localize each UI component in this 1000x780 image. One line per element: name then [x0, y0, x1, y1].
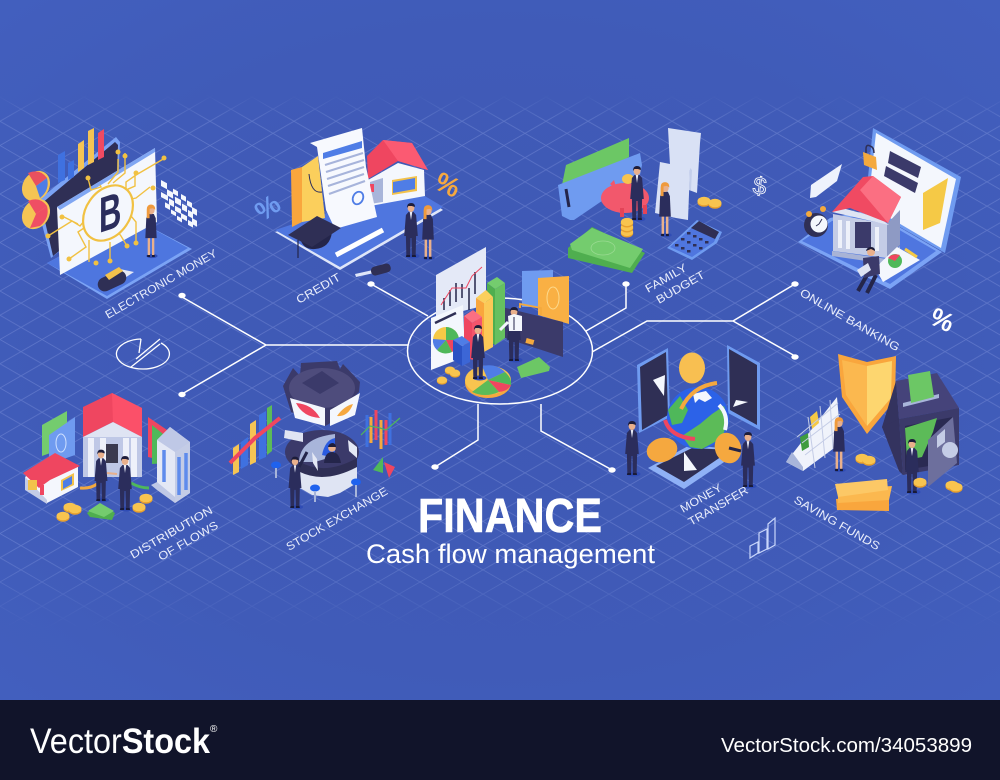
bank building	[83, 393, 142, 477]
man back view	[471, 325, 486, 380]
bar chart on laptop	[58, 128, 104, 183]
handshake men	[95, 450, 134, 512]
qr code	[161, 180, 197, 231]
sitting man with laptop	[857, 247, 880, 293]
shopping bag	[291, 156, 325, 227]
speech bubble	[810, 164, 842, 198]
red trend arrow	[230, 418, 280, 463]
desk screens	[312, 440, 357, 471]
3d bars	[453, 277, 505, 366]
subtitle: Cash flow management	[366, 539, 655, 569]
coin stack	[621, 218, 633, 238]
blue banknote	[522, 270, 553, 307]
key	[355, 263, 392, 277]
alarm clock	[804, 206, 828, 237]
panel: money transfer	[625, 345, 760, 489]
panel: credit	[249, 128, 465, 277]
pie discs	[16, 165, 56, 235]
receipts	[655, 128, 701, 220]
top coin	[679, 352, 705, 384]
title: FINANCE	[418, 490, 602, 543]
panel: stock exchange	[230, 361, 400, 509]
wallet	[558, 153, 642, 220]
bitcoin circle	[73, 176, 143, 250]
piggy bank	[601, 180, 649, 217]
triangles	[373, 457, 395, 478]
usb stick	[95, 267, 134, 294]
orange banknote	[538, 276, 569, 324]
overhead ticker ring	[283, 361, 360, 426]
panel: family budget	[558, 128, 768, 273]
gold circuit traces	[48, 153, 165, 262]
credit card	[275, 190, 443, 270]
bank building	[832, 176, 901, 264]
candlesticks	[361, 410, 400, 449]
man with coin	[630, 166, 646, 222]
label: family budget	[644, 262, 707, 307]
stools	[271, 462, 361, 502]
coins	[437, 367, 460, 385]
calendar	[786, 397, 841, 471]
laptop base	[47, 218, 192, 299]
standing man	[289, 452, 307, 509]
footer image id: VectorStock.com/34053899	[721, 735, 972, 757]
coins	[56, 494, 152, 522]
house	[23, 453, 80, 504]
distribution: DISTRIBUTION	[128, 505, 215, 562]
percent right: %	[430, 166, 465, 204]
yellow panel	[923, 178, 948, 230]
bottom phone	[648, 445, 742, 489]
dollar sign outline: $	[751, 172, 768, 201]
label: electronic money: ELECTRONIC MONEY	[104, 248, 220, 322]
pie chart 3d	[465, 365, 511, 398]
label: money transfer	[678, 482, 751, 529]
panel: electronic money	[16, 128, 197, 299]
bar chart	[233, 405, 272, 475]
budget: BUDGET	[654, 269, 707, 307]
globe	[667, 387, 729, 449]
person	[145, 205, 158, 258]
graduation cap	[288, 216, 341, 258]
flow arrows	[80, 483, 149, 488]
briefcase	[502, 304, 563, 357]
bar chart outline icon	[750, 518, 775, 558]
laptop screen	[865, 128, 961, 253]
flow connector lines	[178, 281, 799, 473]
coins	[856, 454, 962, 493]
isometric grid background	[0, 102, 1000, 608]
cash pile	[568, 227, 645, 273]
laptop screen	[36, 137, 120, 258]
green cash	[87, 503, 115, 520]
men	[625, 421, 757, 489]
tower	[151, 427, 190, 503]
family: FAMILY	[644, 262, 690, 296]
money: MONEY	[678, 482, 725, 516]
label: stock exchange: STOCK EXCHANGE	[284, 486, 390, 554]
panel: distribution of flows	[23, 339, 190, 522]
chart sheet	[436, 247, 486, 318]
calculator	[667, 220, 722, 260]
percent sign: %	[925, 301, 959, 338]
house	[367, 140, 428, 206]
coins	[698, 197, 722, 209]
footer bar	[0, 700, 1000, 780]
report sheet with pie	[431, 305, 465, 370]
bitcoin symbol: B	[99, 181, 121, 244]
label: saving funds: SAVING FUNDS	[792, 494, 882, 553]
green banknotes in wallet	[561, 138, 629, 193]
banknotes	[42, 411, 75, 464]
red green panel	[148, 417, 170, 464]
panel: online banking	[798, 128, 961, 338]
coin into piggy	[622, 174, 634, 184]
percent left: %	[249, 189, 286, 227]
man white shirt	[500, 307, 522, 362]
laptop base	[798, 210, 942, 289]
woman	[833, 417, 846, 472]
side coins	[644, 429, 746, 467]
paper with pie	[875, 247, 920, 282]
business people	[404, 203, 435, 260]
label: online banking: ONLINE BANKING	[798, 287, 901, 354]
service desk	[284, 430, 359, 497]
pie outline icon	[116, 339, 169, 369]
left phone	[637, 348, 670, 433]
woman	[659, 182, 672, 237]
transfer: TRANSFER	[686, 485, 751, 529]
right phone	[727, 345, 760, 430]
safe	[882, 371, 959, 487]
panel: saving funds	[750, 354, 962, 558]
seated trader	[324, 443, 341, 463]
man	[905, 439, 920, 494]
gold bars	[835, 479, 892, 511]
label: distribution of flows	[128, 505, 221, 564]
shield	[838, 354, 896, 434]
registered mark: ®	[210, 724, 218, 735]
label: credit: CREDIT	[294, 272, 343, 307]
dark bars on screen	[884, 151, 921, 193]
footer logo: VectorStock	[30, 722, 210, 761]
of flows: OF FLOWS	[156, 520, 221, 564]
panel: central finance scene	[431, 247, 569, 398]
white circuit board	[57, 148, 157, 275]
padlock	[863, 145, 877, 170]
transfer arrows	[665, 383, 726, 439]
cash	[517, 357, 550, 378]
document	[310, 128, 377, 229]
